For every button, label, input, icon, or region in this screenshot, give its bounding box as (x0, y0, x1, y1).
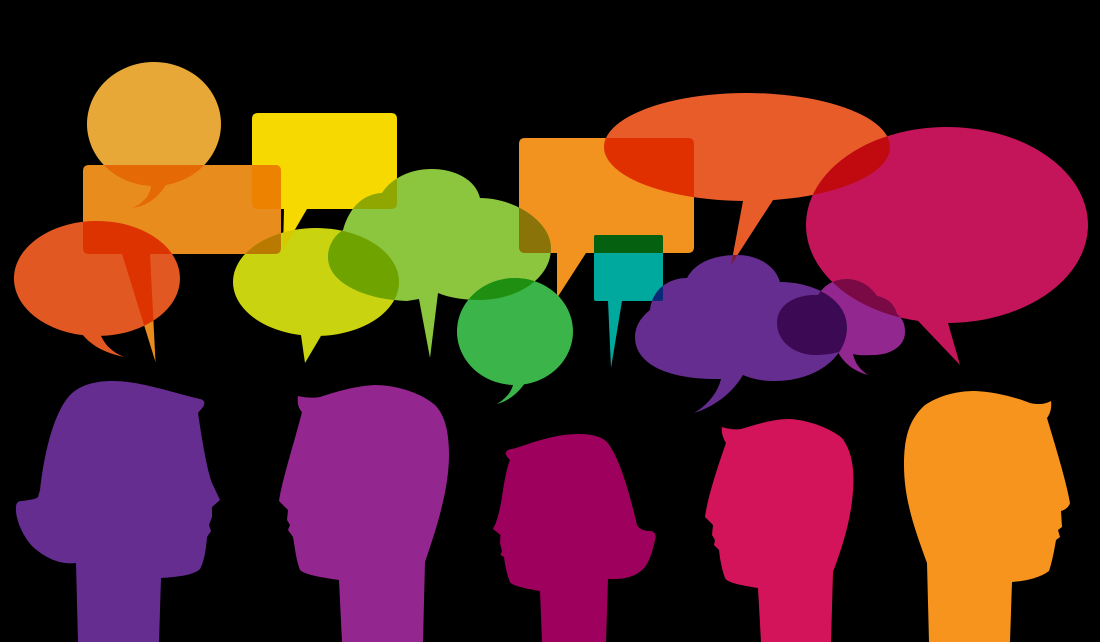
speech bubble: green round (457, 278, 573, 404)
speech bubble: purple cloud (635, 255, 847, 413)
speech bubble: magenta oval (806, 127, 1088, 365)
head: crimson, facing left (705, 419, 854, 642)
speech bubble: light orange round (87, 62, 221, 208)
speech bubble: red-orange oval (14, 221, 180, 357)
head: violet, facing left (279, 385, 449, 642)
speech bubble: orange rectangle centre (519, 138, 694, 298)
speech bubble: yellow rectangle (252, 113, 397, 250)
speech bubble: green cloud (328, 169, 551, 358)
head: orange, facing right (904, 391, 1070, 642)
speech bubble: teal square (594, 235, 663, 368)
speech bubble: lime oval (233, 228, 399, 363)
head: purple, facing right (16, 381, 220, 642)
speech bubble: orange-red oval (604, 93, 890, 265)
head: dark magenta, facing left (493, 434, 656, 642)
speech bubble: orange rectangle left (83, 165, 281, 362)
speech bubble: violet cloud (777, 279, 905, 375)
bubble overlaps (83, 136, 900, 355)
